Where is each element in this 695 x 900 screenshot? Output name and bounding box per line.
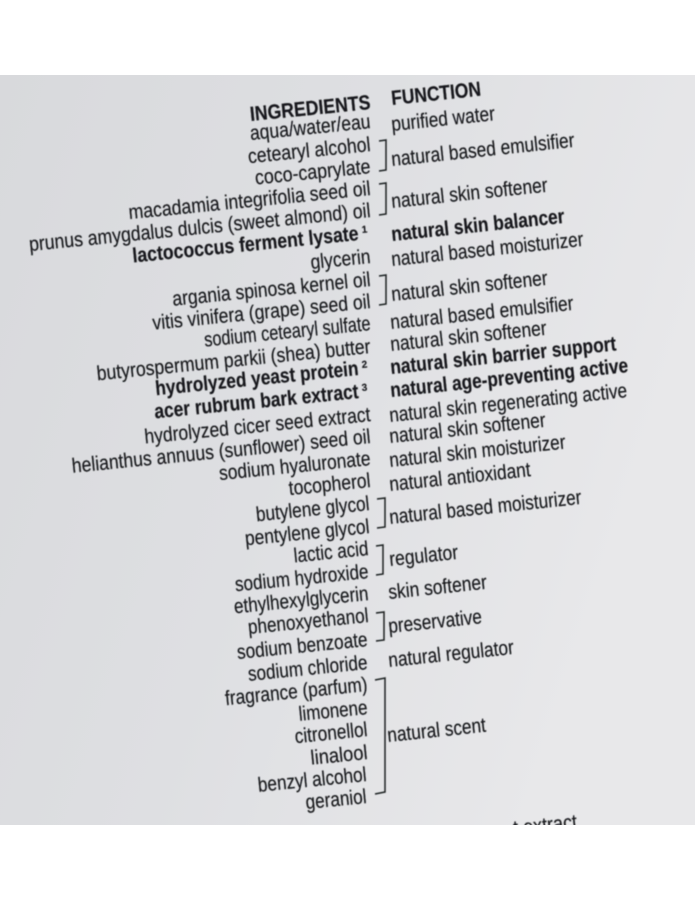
function column: natural based emulsifier: [390, 129, 576, 171]
ingredients column: pentylene glycol: [244, 515, 370, 550]
function column: natural skin softener: [390, 174, 549, 213]
function column: natural based moisturizer: [388, 486, 583, 529]
function column: natural scent: [386, 714, 487, 747]
function column: natural skin regenerating active: [388, 379, 628, 427]
ingredients column: acer rubrum bark extract: [153, 380, 360, 423]
clipped footnote text: t extract: [512, 810, 578, 840]
ingredients column: sodium cetearyl sulfate: [203, 312, 371, 352]
white lower margin: [0, 825, 695, 900]
function column: purified water: [390, 102, 496, 136]
ingredients column: butyrospermum parkii (shea) butter: [96, 335, 372, 385]
ingredients column: ethylhexylglycerin: [233, 582, 369, 618]
function column: preservative: [387, 605, 483, 638]
ingredients column: 2: [361, 359, 368, 371]
grouping brackets: [375, 140, 386, 794]
ingredients column: butylene glycol: [255, 492, 370, 526]
ingredients column: benzyl alcohol: [257, 763, 367, 797]
ingredients column: sodium hyaluronate: [218, 447, 371, 485]
function column: regulator: [388, 541, 459, 571]
function column: natural skin softener: [388, 409, 547, 448]
ingredients column: argania spinosa kernel oil: [171, 268, 371, 311]
function column: [386, 102, 629, 747]
ingredients column: sodium hydroxide: [234, 560, 369, 596]
ingredients column: aqua/water/eau: [249, 110, 371, 145]
ingredients column: 1: [361, 224, 368, 236]
ingredients column: hydrolyzed cicer seed extract: [143, 403, 372, 449]
ingredients column: linalool: [309, 741, 368, 770]
function column: natural skin moisturizer: [388, 431, 567, 472]
ingredients column: hydrolyzed yeast protein: [154, 357, 359, 400]
ingredients column: lactococcus ferment lysate: [131, 222, 359, 268]
function column: natural based moisturizer: [390, 228, 585, 271]
function column: skin softener: [387, 571, 488, 604]
heading: function: FUNCTION: [390, 78, 482, 110]
ingredients column: coco-caprylate: [254, 155, 371, 189]
ingredients column: lactic acid: [293, 537, 369, 567]
ingredients column: vitis vinifera (grape) seed oil: [151, 290, 371, 335]
function column: natural skin softener: [389, 317, 548, 356]
ingredients column: macadamia integrifolia seed oil: [127, 177, 371, 224]
ingredients column: 3: [361, 382, 368, 394]
ingredients column: sodium benzoate: [236, 628, 368, 664]
function column: natural skin barrier support: [389, 332, 617, 379]
ingredients column: glycerin: [310, 245, 371, 274]
ingredients column: sodium chloride: [247, 651, 368, 686]
ingredients column: citronellol: [294, 718, 368, 748]
heading: ingredients: INGREDIENTS: [249, 91, 371, 126]
ingredients column: helianthus annuus (sunflower) seed oil: [71, 425, 371, 478]
function column: natural skin softener: [390, 267, 549, 306]
ingredients column: tocopherol: [288, 469, 371, 500]
function column: natural regulator: [387, 636, 515, 672]
ingredients column: geraniol: [305, 785, 367, 814]
function column: natural antioxidant: [388, 458, 532, 496]
ingredients column: phenoxyethanol: [247, 604, 369, 639]
ingredient and function table: [28, 78, 629, 840]
ingredients column: [28, 110, 372, 814]
function column: natural skin balancer: [390, 205, 566, 246]
function column: natural age-preventing active: [389, 354, 629, 402]
ingredients column: prunus amygdalus dulcis (sweet almond) oil: [28, 199, 371, 256]
function column: natural based emulsifier: [389, 292, 575, 334]
ingredients column: fragrance (parfum): [224, 673, 368, 710]
ingredients column: cetearyl alcohol: [247, 133, 371, 168]
ingredients column: limonene: [298, 696, 368, 726]
